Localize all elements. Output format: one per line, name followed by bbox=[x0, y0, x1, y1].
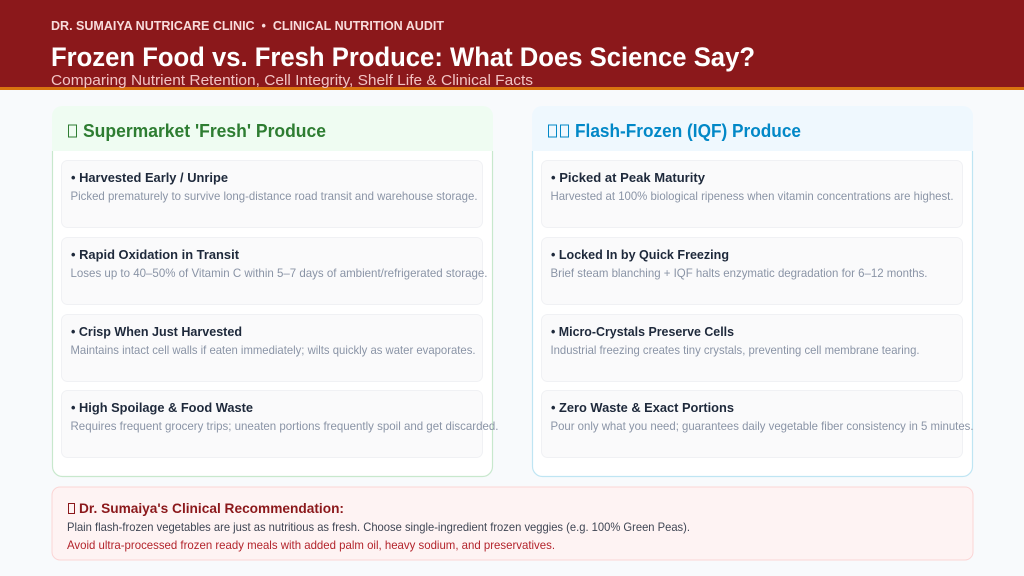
card: crisp when harvested: Maintains intact cell walls if eaten immediately; wilts quickly as water evaporates. bbox=[70, 343, 476, 357]
card: micro-crystals: • Micro-Crystals Preserve Cells bbox=[551, 324, 734, 339]
subtitle: Comparing Nutrient Retention, Cell Integrity, Shelf Life & Clinical Facts bbox=[51, 72, 533, 89]
card: locked in bbox=[542, 238, 962, 304]
card: picked at peak bbox=[542, 160, 962, 228]
card: locked in: Brief steam blanching + IQF halts enzymatic degradation for 6–12 months. bbox=[550, 266, 928, 280]
card: micro-crystals bbox=[542, 314, 962, 382]
card: high spoilage: Requires frequent grocery trips; uneaten portions frequently spoil and get discarded. bbox=[70, 419, 498, 433]
card: rapid oxidation: • Rapid Oxidation in Transit bbox=[71, 247, 240, 262]
card: micro-crystals: Industrial freezing creates tiny crystals, preventing cell membrane tearing. bbox=[550, 343, 920, 357]
card: rapid oxidation bbox=[62, 238, 488, 304]
card: high spoilage: • High Spoilage & Food Waste bbox=[71, 400, 253, 415]
card: zero waste: • Zero Waste & Exact Portions bbox=[551, 400, 734, 415]
callout heading: Dr. Sumaiya's Clinical Recommendation: bbox=[79, 500, 344, 516]
panel: flash-frozen produce bbox=[532, 106, 974, 476]
card: zero waste bbox=[542, 390, 974, 458]
clinic kicker: DR. SUMAIYA NUTRICARE CLINIC • CLINICAL NUTRITION AUDIT bbox=[51, 18, 444, 33]
card: crisp when harvested bbox=[62, 314, 482, 382]
card: crisp when harvested: • Crisp When Just Harvested bbox=[71, 324, 242, 339]
callout: clinical recommendation bbox=[52, 487, 973, 560]
card: picked at peak: • Picked at Peak Maturity bbox=[551, 170, 706, 185]
card: harvested early: • Harvested Early / Unripe bbox=[71, 170, 228, 185]
card: locked in: • Locked In by Quick Freezing bbox=[551, 247, 729, 262]
callout warning: Avoid ultra-processed frozen ready meals with added palm oil, heavy sodium, and preservatives. bbox=[67, 538, 555, 552]
callout body: Plain flash-frozen vegetables are just as nutritious as fresh. Choose single-ingredient frozen veggies (e.g. 100% Green Peas). bbox=[67, 520, 690, 534]
panel heading: frozen: Flash-Frozen (IQF) Produce bbox=[575, 121, 801, 141]
header banner bbox=[0, 0, 1024, 90]
card: picked at peak: Harvested at 100% biological ripeness when vitamin concentrations are highest. bbox=[550, 189, 954, 203]
card: high spoilage bbox=[62, 390, 498, 458]
card: zero waste: Pour only what you need; guarantees daily vegetable fiber consistency in 5 minutes. bbox=[550, 419, 974, 433]
panel: supermarket fresh produce bbox=[52, 106, 498, 476]
title: Frozen Food vs. Fresh Produce: What Does Science Say? bbox=[51, 42, 755, 72]
card: harvested early bbox=[62, 160, 482, 228]
card: rapid oxidation: Loses up to 40–50% of Vitamin C within 5–7 days of ambient/refrigerated storage. bbox=[70, 266, 488, 280]
card: harvested early: Picked prematurely to survive long-distance road transit and warehouse storage. bbox=[70, 189, 478, 203]
panel heading: fresh: Supermarket 'Fresh' Produce bbox=[83, 121, 326, 141]
